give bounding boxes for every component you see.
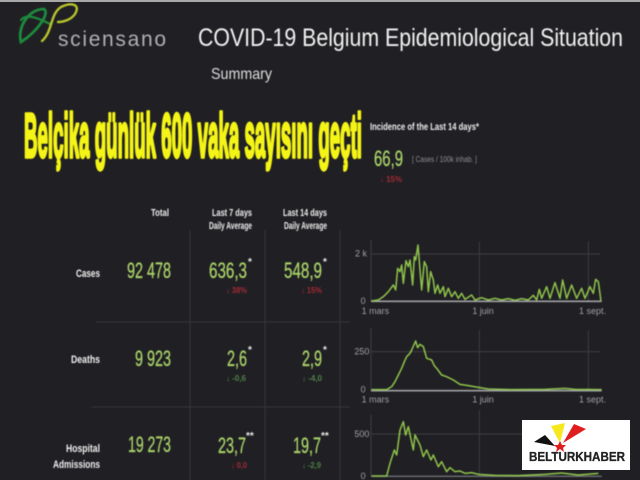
- row: cases: 636,3: [209, 258, 247, 283]
- icon: flag rays: [534, 423, 586, 452]
- icon: green leaf mark: [20, 4, 77, 42]
- row: cases: ↓ 15%: [301, 286, 322, 295]
- row: hospital admissions: 23,7: [218, 433, 246, 458]
- chart: deaths: [354, 328, 606, 405]
- row: hospital admissions: [53, 431, 329, 471]
- row: hospital admissions: 19,7: [293, 433, 321, 458]
- row: deaths: 9 923: [135, 346, 171, 371]
- chart: deaths: 1 juin: [472, 395, 494, 405]
- row: hospital admissions: 19 273: [128, 432, 171, 457]
- table column headers: Daily Average: [284, 221, 327, 232]
- row: deaths: *: [248, 345, 252, 356]
- row: hospital admissions: Hospital: [66, 443, 100, 455]
- row: deaths: *: [323, 345, 327, 356]
- table grid lines: [92, 230, 350, 480]
- row: hospital admissions: ↓ 0,0: [231, 461, 248, 470]
- incidence unit: [ Cases / 100k inhab. ]: [412, 155, 477, 164]
- chart: deaths: 0: [361, 385, 366, 395]
- incidence value: 66,9: [374, 146, 403, 171]
- chart: deaths: 250: [354, 347, 369, 357]
- incidence change: ↓ 15%: [380, 175, 402, 184]
- subtitle: Summary: Summary: [211, 66, 272, 83]
- row: deaths: 2,6: [227, 346, 247, 371]
- logo: sciensano: [20, 4, 166, 51]
- chart: hospital admissions: [354, 410, 602, 480]
- logo wordmark: sciensano: [58, 28, 166, 51]
- row: hospital admissions: **: [246, 431, 254, 442]
- row: deaths: Deaths: [71, 354, 100, 366]
- table column headers: Last 7 days: [212, 208, 252, 219]
- incidence heading: Incidence of the Last 14 days*: [370, 122, 479, 133]
- table column headers: Last 14 days: [283, 208, 327, 219]
- table column headers: Total: [151, 208, 169, 219]
- row: cases: *: [323, 257, 327, 268]
- chart: cases: [355, 240, 606, 316]
- chart: deaths: 1 mars: [362, 395, 390, 405]
- table column headers: [151, 208, 327, 232]
- chart: cases: 0: [361, 296, 366, 306]
- row: hospital admissions: ↓ -2,9: [302, 461, 322, 470]
- table column headers: Daily Average: [209, 221, 252, 232]
- chart: deaths: 1 sept.: [579, 395, 606, 405]
- row: deaths: ↓ -4,0: [302, 374, 323, 383]
- row: cases: Cases: [76, 268, 100, 280]
- row: cases: 548,9: [284, 258, 322, 283]
- row: cases: ↓ 38%: [226, 286, 247, 295]
- chart: cases: 1 sept.: [579, 306, 606, 316]
- row: deaths: 2,9: [302, 346, 322, 371]
- row: cases: *: [248, 257, 252, 268]
- row: cases: [76, 257, 327, 295]
- row: deaths: ↓ -0,6: [226, 374, 247, 383]
- logo text: BELTURKHABER: [529, 449, 626, 464]
- chart: cases: 1 mars: [362, 306, 390, 316]
- row: deaths: [71, 345, 327, 383]
- row: hospital admissions: Admissions: [53, 459, 100, 471]
- logo box: belturkhaber: [522, 420, 630, 470]
- row: hospital admissions: **: [321, 431, 329, 442]
- row: cases: 92 478: [127, 258, 171, 283]
- panel: incidence: [370, 122, 479, 184]
- chart: cases: 2 k: [355, 249, 367, 259]
- chart: hospital admissions: 500: [354, 429, 369, 439]
- chart: cases: 1 juin: [472, 306, 494, 316]
